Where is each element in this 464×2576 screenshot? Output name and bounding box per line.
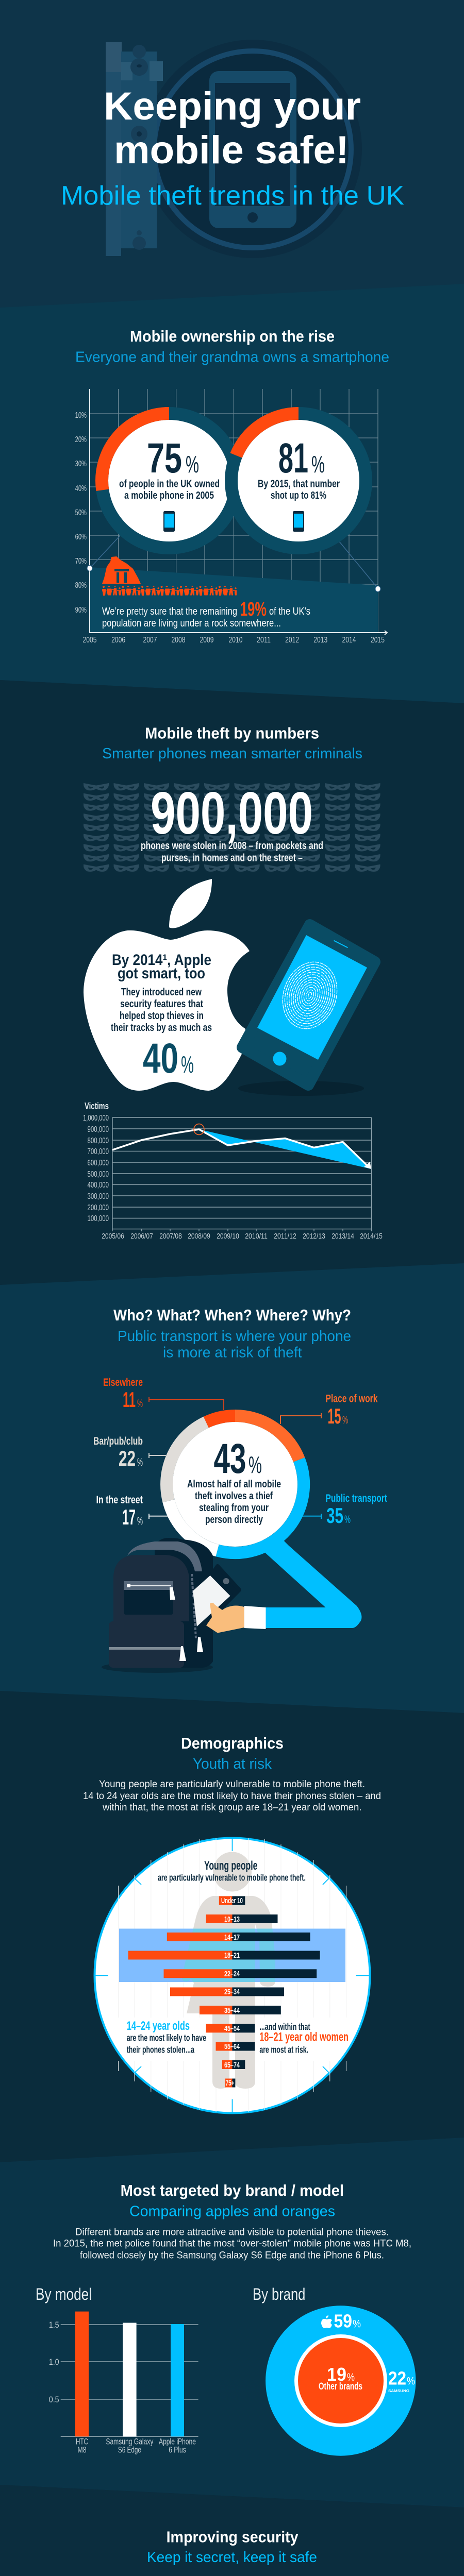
apple shape with text: By 2014¹, Apple [112, 952, 211, 969]
label: elsewhere: % [137, 1398, 143, 1410]
intro paragraph: within that, the most at risk group are 18–21 year old women. [102, 1802, 362, 1813]
y axis labels: 100,000 [88, 1214, 109, 1223]
icon: apple logo [321, 2315, 332, 2328]
label: in the street: % [137, 1515, 143, 1527]
x axis labels: 2007/08 [159, 1232, 182, 1241]
label: elsewhere: Elsewhere [103, 1377, 143, 1388]
icon: phone [293, 511, 304, 532]
callout: 18-21: are most at risk. [259, 2045, 308, 2055]
age labels: 45–54 [224, 2024, 240, 2033]
donut: 81% by 2015: 81 [278, 435, 308, 482]
nested circle chart: by brand: % [407, 2376, 415, 2387]
callout: 14-24: 14–24 year olds [127, 2019, 190, 2033]
x axis labels: 2015 [371, 636, 385, 645]
donut center text [187, 1435, 281, 1526]
subheading: Youth at risk [193, 1756, 272, 1772]
donut: 75% in 2005: 75 [147, 435, 182, 482]
phone being stolen [193, 1566, 239, 1626]
x axis labels: 2006/07 [130, 1232, 153, 1241]
data line [112, 1129, 368, 1166]
bar chart: by model: 6 Plus [169, 2445, 186, 2455]
callout text: 19% [240, 599, 267, 620]
illustration: tilted phone with fingerprint [238, 925, 375, 1096]
y axis labels: 10% [75, 411, 87, 420]
age labels: Under 10 [221, 1896, 243, 1905]
label: bar pub club: Bar/pub/club [93, 1435, 143, 1447]
donut: 75% in 2005: a mobile phone in 2005 [124, 490, 214, 501]
label: elsewhere [103, 1377, 224, 1412]
nested circle chart: by brand: 22 [388, 2368, 406, 2389]
y axis labels: 600,000 [88, 1159, 109, 1167]
label: bar pub club: 22 [119, 1446, 136, 1470]
section: demographics [83, 1734, 381, 2113]
highlight ring [194, 1124, 204, 1134]
x axis labels: 2009 [200, 636, 214, 645]
target circle population chart [94, 1837, 370, 2113]
intro paragraph: Different brands are more attractive and visible to potential phone thieves. [75, 2227, 389, 2238]
apple shape with text: security features that [120, 998, 203, 1010]
y axis labels [83, 1114, 109, 1223]
x axis labels: 2014/15 [360, 1232, 383, 1241]
heading: Most targeted by brand / model [121, 2181, 344, 2199]
bar chart: by model: 1.5 [49, 2320, 59, 2330]
nested circle chart: by brand: Other brands [319, 2381, 362, 2392]
caption: phones were stolen in 2008 – from pockets and [141, 840, 323, 852]
heading: Mobile ownership on the rise [130, 327, 335, 345]
intro paragraph: In 2015, the met police found that the most “over-stolen” mobile phone was HTC M8, [53, 2238, 411, 2249]
x axis labels: 2008/09 [188, 1232, 210, 1241]
section: improving security [148, 2531, 317, 2565]
donut center text: % [248, 1451, 262, 1478]
bar chart: by model: Samsung Galaxy [106, 2437, 154, 2447]
callout text: We’re pretty sure that the remaining [102, 606, 237, 617]
label: place of work: 15 [328, 1404, 341, 1428]
x axis labels: 2011/12 [274, 1232, 296, 1241]
icon: phone [163, 511, 175, 532]
title: mobile safe! [114, 128, 349, 172]
woman silhouette [182, 1852, 275, 2089]
intro paragraph [83, 1778, 381, 1813]
age labels: 35–44 [224, 2006, 240, 2015]
age labels: 14–17 [224, 1933, 240, 1942]
label: elsewhere: 11 [123, 1387, 136, 1412]
subtitle: Mobile theft trends in the UK [61, 181, 404, 211]
x axis labels: 2012 [285, 636, 299, 645]
bar chart: by model: Apple iPhone [159, 2437, 196, 2447]
age labels: 25–34 [224, 1988, 240, 1996]
donut: 75% in 2005 [95, 407, 243, 554]
x axis labels: 2011 [257, 636, 271, 645]
age labels: 55–64 [224, 2042, 240, 2051]
y axis labels: 400,000 [88, 1181, 109, 1190]
y axis labels: 70% [75, 557, 87, 566]
x axis labels: 2010/11 [245, 1232, 268, 1241]
donut: 81% by 2015: % [311, 451, 325, 478]
y axis labels: 700,000 [88, 1147, 109, 1156]
donut: 81% by 2015: shot up to 81% [271, 490, 326, 501]
bar chart: by model: S6 Edge [118, 2445, 141, 2455]
female bars [128, 1896, 232, 2088]
label: place of work [280, 1393, 378, 1428]
section: most targeted [36, 2181, 416, 2456]
age labels: 65–74 [224, 2061, 240, 2070]
callout: 14-24 [127, 2019, 206, 2055]
donut: 75% in 2005: of people in the UK owned [119, 479, 220, 490]
apple shape with text: got smart, too [118, 965, 205, 982]
subheading: Smarter phones mean smarter criminals [102, 745, 362, 762]
caption: purses, in homes and on the street – [161, 852, 303, 863]
illustration: backpack [102, 1538, 239, 1673]
nested circle chart: by brand: SAMSUNG [388, 2388, 409, 2393]
label: in the street [96, 1494, 169, 1529]
label: public transport: % [344, 1514, 351, 1526]
thief mask grid [84, 783, 380, 873]
section: who what when where why [93, 1306, 387, 1673]
nested circle chart: by brand: By brand [253, 2285, 305, 2303]
chart grid and axes [87, 389, 387, 635]
callout text: population are living under a rock somewhere... [102, 618, 281, 629]
label: place of work: % [342, 1414, 348, 1426]
donut: 81% by 2015 [225, 407, 372, 554]
bar chart: by model: M8 [77, 2445, 87, 2455]
label: place of work: Place of work [326, 1393, 378, 1404]
hero illustration: phone in ring [143, 40, 362, 258]
subheading: Everyone and their grandma owns a smartphone [75, 349, 389, 366]
illustration: thief hand and cuff [206, 1603, 266, 1633]
nested circle chart: by brand [253, 2285, 416, 2456]
nested circle chart: by brand: 19 [327, 2364, 346, 2385]
callout text: of the UK’s [269, 606, 310, 617]
section: mobile ownership [75, 327, 389, 645]
apple shape with text: % [181, 1051, 194, 1078]
callout: 18-21: 18–21 year old women [259, 2030, 349, 2044]
y axis labels: 1,000,000 [83, 1114, 109, 1123]
x axis labels: 2005/06 [102, 1232, 124, 1241]
subheading: is more at risk of theft [163, 1345, 302, 1361]
y axis labels: 900,000 [88, 1125, 109, 1134]
x axis labels: 2007 [143, 636, 157, 645]
y axis labels: 500,000 [88, 1170, 109, 1179]
callout: 18-21 [259, 2022, 349, 2055]
line chart: victims [83, 1101, 383, 1241]
bar chart: by model [36, 2285, 198, 2455]
label: bar pub club [93, 1435, 166, 1470]
icon: orange rock shelter [102, 556, 141, 584]
age labels: 75+ [226, 2079, 235, 2088]
age labels: 10–13 [224, 1915, 240, 1924]
x axis labels: 2008 [171, 636, 186, 645]
x axis labels: 2013 [313, 636, 327, 645]
chart heading: Young people [204, 1859, 257, 1873]
y axis labels: 800,000 [88, 1137, 109, 1145]
donut center text: stealing from your [199, 1502, 269, 1514]
bar chart: by model: By model [36, 2285, 92, 2303]
label: in the street: In the street [96, 1494, 143, 1506]
subheading: Public transport is where your phone [118, 1328, 351, 1345]
label: public transport: Public transport [326, 1493, 387, 1504]
nested circle chart: by brand: % [347, 2371, 355, 2383]
y axis labels: 300,000 [88, 1192, 109, 1201]
donut chart: location of theft [167, 1416, 304, 1553]
donut center text: theft involves a thief [195, 1490, 273, 1502]
intro paragraph: Young people are particularly vulnerable to mobile phone theft. [99, 1778, 365, 1790]
male bars [232, 1896, 320, 2088]
chart heading [158, 1859, 306, 1883]
label: public transport [303, 1493, 387, 1528]
apple shape with text: helped stop thieves in [120, 1010, 204, 1022]
bar chart: by model: 1.0 [49, 2357, 59, 2367]
grid lines [112, 1117, 371, 1231]
y axis labels: 200,000 [88, 1204, 109, 1212]
callout text [102, 599, 310, 629]
bar chart: by model: 0.5 [49, 2395, 59, 2404]
age labels: 22–24 [224, 1970, 240, 1978]
y axis labels [75, 411, 87, 615]
heading: Improving security [167, 2528, 299, 2546]
x axis labels [82, 636, 385, 645]
hero illustration: phone side view [106, 42, 163, 256]
highlight band 14-24 [119, 1929, 345, 1982]
heading: Mobile theft by numbers [145, 724, 319, 742]
subheading: Keep it secret, keep it safe [147, 2549, 317, 2566]
nested circle chart: by brand: % [353, 2318, 361, 2330]
chart heading: are particularly vulnerable to mobile phone theft. [158, 1872, 306, 1883]
age labels: 18–21 [224, 1951, 240, 1960]
heading: Demographics [181, 1734, 284, 1752]
donut center text: 43 [213, 1435, 246, 1482]
callout: 14-24: are the most likely to have [127, 2033, 206, 2043]
title [104, 84, 361, 172]
donut center text: person directly [205, 1514, 263, 1526]
x axis labels: 2012/13 [303, 1232, 325, 1241]
age labels [221, 1896, 243, 2088]
donut center text: Almost half of all mobile [187, 1479, 281, 1490]
y axis labels: 20% [75, 435, 87, 444]
x axis labels: 2010 [229, 636, 243, 645]
caption [141, 840, 323, 863]
x axis labels: 2013/14 [332, 1232, 354, 1241]
callout: 14-24: their phones stolen...a [127, 2045, 195, 2055]
x axis labels [102, 1232, 383, 1241]
label: in the street: 17 [122, 1505, 136, 1529]
callout: 18-21: ...and within that [259, 2022, 310, 2032]
y axis labels: 80% [75, 581, 87, 590]
big number: 900,000 [151, 779, 313, 846]
subheading [118, 1328, 351, 1361]
chart title: Victims [85, 1101, 109, 1111]
icon: row of people [102, 586, 237, 596]
intro paragraph: followed closely by the Samsung Galaxy S6 Edge and the iPhone 6 Plus. [80, 2250, 384, 2261]
y axis labels: 50% [75, 509, 87, 517]
label: public transport: 35 [326, 1503, 343, 1528]
y axis labels: 60% [75, 533, 87, 541]
intro paragraph: 14 to 24 year olds are the most likely to have their phones stolen – and [83, 1790, 381, 1802]
x axis labels: 2009/10 [217, 1232, 239, 1241]
donut: 75% in 2005: % [186, 451, 199, 478]
x axis labels: 2006 [111, 636, 125, 645]
intro paragraph [53, 2227, 411, 2261]
x axis labels: 2005 [82, 636, 97, 645]
decline wedge [199, 1129, 371, 1169]
label: bar pub club: % [137, 1456, 143, 1468]
bar chart: by model: HTC [76, 2437, 88, 2447]
apple shape with text: They introduced new [121, 987, 202, 998]
apple shape with text: 40 [143, 1035, 178, 1082]
icon: fingerprint [274, 955, 345, 1036]
apple shape with text: their tracks by as much as [111, 1022, 212, 1033]
y axis labels: 30% [75, 460, 87, 468]
heading: Who? What? When? Where? Why? [113, 1306, 351, 1324]
illustration: magnifier handle arm [258, 1538, 361, 1628]
title: Keeping your [104, 84, 361, 128]
nested circle chart: by brand: 59 [334, 2311, 352, 2332]
x axis labels: 2014 [342, 636, 356, 645]
y axis labels: 90% [75, 606, 87, 615]
section: mobile theft by numbers [83, 724, 383, 1241]
apple shape with text [84, 879, 250, 1091]
arrow head [364, 1162, 371, 1169]
donut: 81% by 2015: By 2015, that number [258, 479, 340, 490]
y axis labels: 40% [75, 484, 87, 493]
subheading: Comparing apples and oranges [129, 2203, 335, 2219]
